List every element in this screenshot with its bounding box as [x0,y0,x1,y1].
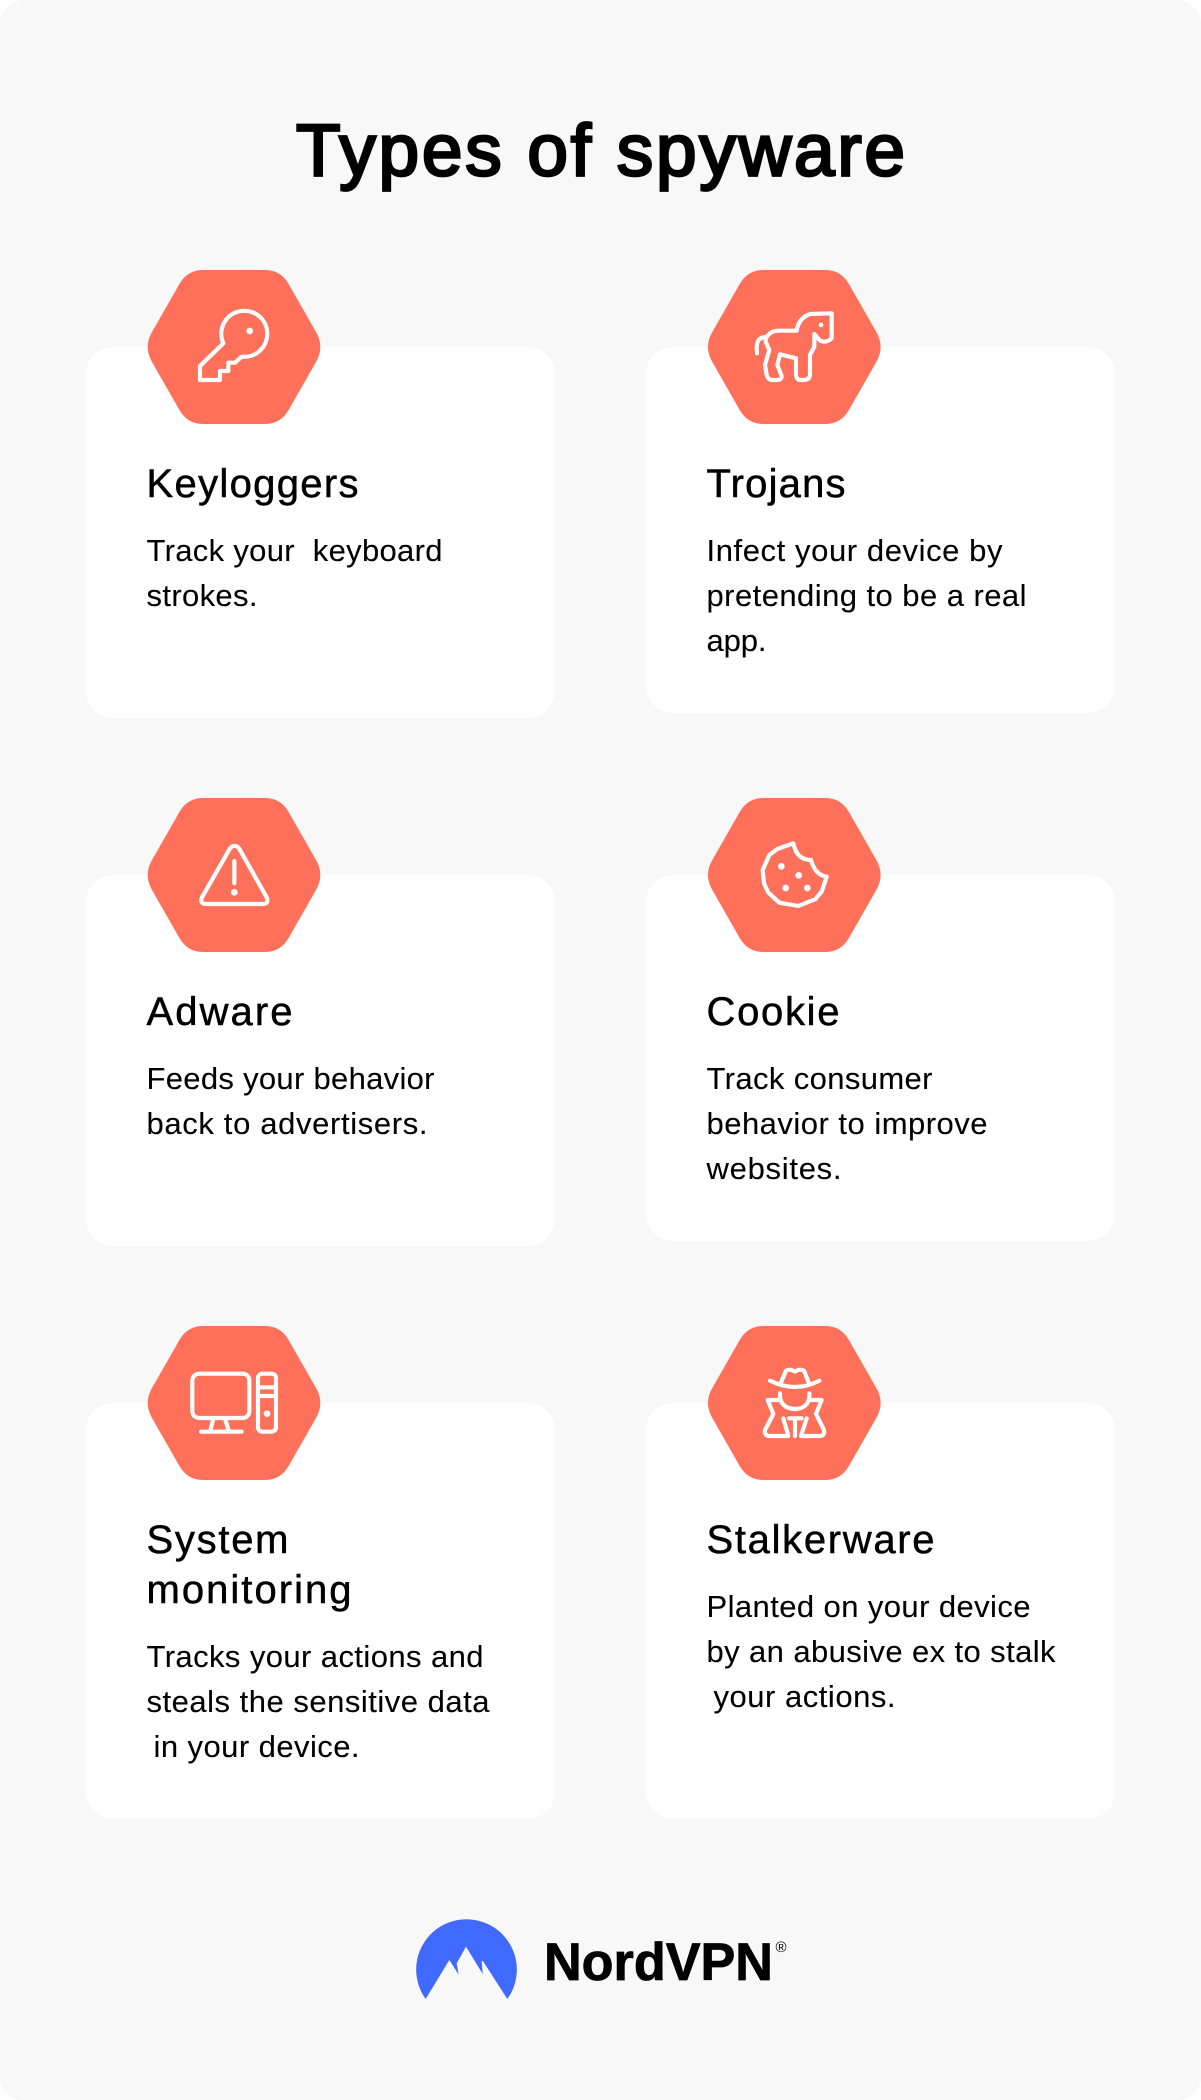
text: trojans description: Infect your device by [706,533,1003,568]
text: trojans description: app. [706,623,766,658]
icon: computer hexagon [148,1326,320,1480]
text: cookie description [706,1061,988,1186]
panel: system monitoring [86,1326,555,1819]
text: adware description: Feeds your behavior [146,1061,434,1096]
text: trojans description [706,533,1026,658]
logo: NordVPN [416,1919,787,1999]
text: system monitoring description: steals the sensitive data [146,1684,490,1719]
panel: adware [86,798,555,1246]
icon: cookie hexagon [708,798,881,952]
text: adware description [146,1061,434,1141]
panel: stalkerware [646,1326,1115,1819]
icon: key hexagon [148,270,320,424]
heading: cookie: Cookie [706,990,840,1034]
panel: keyloggers [86,270,555,718]
text: cookie description: Track consumer [706,1061,932,1096]
wordmark: NordVPN [544,1933,773,1992]
heading: keyloggers: Keyloggers [146,462,358,506]
heading: trojans: Trojans [706,462,846,506]
heading: adware: Adware [146,990,292,1034]
panel: trojans [646,270,1115,713]
text: trojans description: pretending to be a real [706,578,1026,613]
icon: warning hexagon [148,798,320,952]
text: system monitoring description: Tracks your actions and [146,1639,484,1674]
icon: NordVPN mountain [416,1919,517,1999]
title: Types of spyware [296,110,905,192]
text: stalkerware description [706,1589,1056,1714]
heading: stalkerware: Stalkerware [706,1518,934,1562]
icon: spy hexagon [708,1326,881,1480]
text: system monitoring description: in your device. [154,1729,360,1764]
text: cookie description: behavior to improve [706,1106,988,1141]
heading: system monitoring: System [146,1518,288,1562]
text: stalkerware description: your actions. [714,1679,896,1714]
text: keyloggers description: Track your keyboard [146,533,442,568]
heading: system monitoring [146,1518,352,1612]
heading: system monitoring: monitoring [146,1568,352,1612]
text: keyloggers description: strokes. [146,578,258,613]
icon: horse hexagon [708,270,881,424]
text: keyloggers description [146,533,442,613]
registered mark: ® [776,1939,787,1956]
panel: cookie [646,798,1115,1241]
text: system monitoring description [146,1639,490,1764]
text: adware description: back to advertisers. [146,1106,428,1141]
text: stalkerware description: by an abusive ex to stalk [706,1634,1056,1669]
text: cookie description: websites. [706,1151,842,1186]
text: stalkerware description: Planted on your device [706,1589,1030,1624]
